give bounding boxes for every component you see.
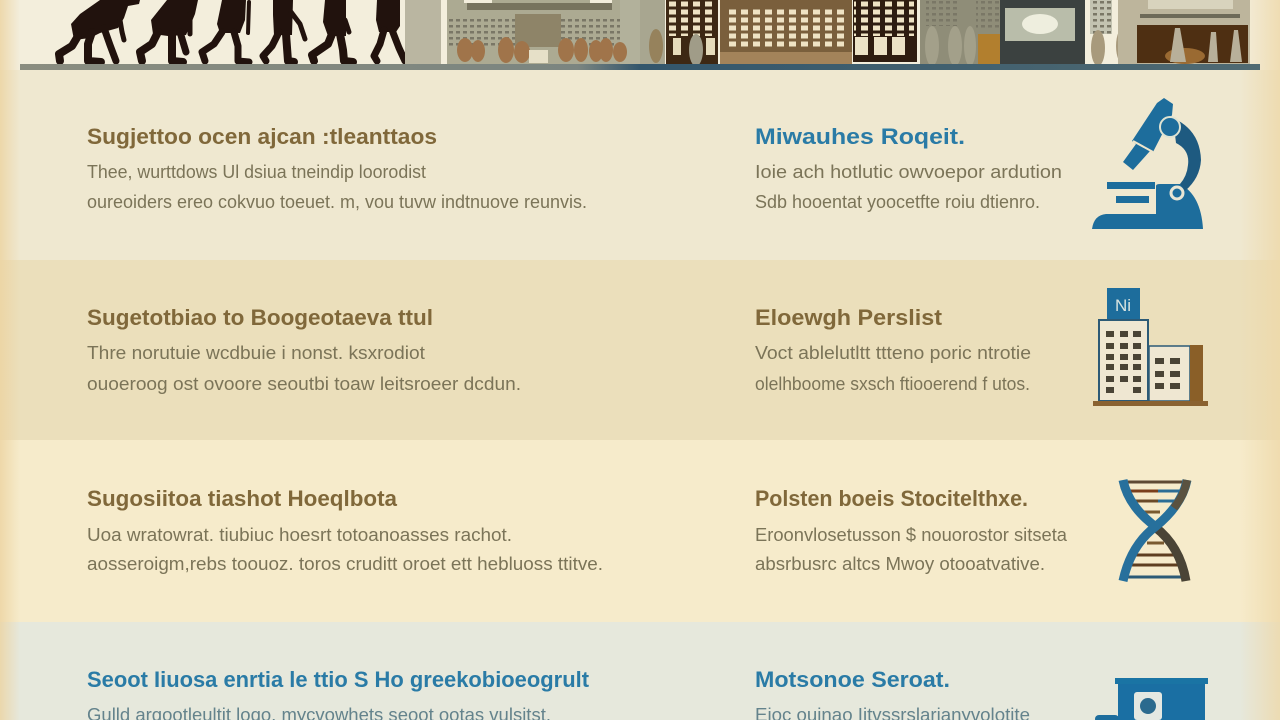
text: row 2 right line 1: Voct ablelutltt ttteno poric ntrotie: [755, 343, 1031, 363]
panel: row 1 background: [0, 70, 1280, 260]
text: row 2 right line 2: olelhboome sxsch ftiooerend f utos.: [755, 374, 1030, 394]
text: row 2 left line 2: ouoeroog ost ovoore seoutbi toaw leitsroeer dcdun.: [87, 374, 521, 394]
icon: DNA helix: [1123, 480, 1187, 581]
panel: row 4 content: [87, 667, 1030, 720]
grey towers: [920, 0, 1000, 64]
panel: row 1 content: [87, 124, 1062, 212]
text: row 1 right line 1: Ioie ach hotlutic owvoepor ardution: [755, 162, 1062, 182]
icon: blue device: [1095, 678, 1208, 720]
panel: header background: [0, 0, 1280, 70]
ground line: [20, 64, 1260, 70]
dark tower: [853, 0, 917, 62]
beige civic building: [1118, 0, 1250, 64]
dark screen building: [1000, 0, 1085, 64]
text: row 1 right line 2: Sdb hooentat yoocetfte roiu dtienro.: [755, 192, 1040, 212]
panel: row 3 content: [87, 486, 1068, 574]
figure 5: [312, 0, 353, 62]
shrubs: [457, 37, 627, 63]
illustration: human evolution silhouettes: [59, 0, 405, 62]
text: row 3 left line 2: aosseroigm,rebs toouoz. toros cruditt oroet ett hebluoss ttitve.: [87, 554, 603, 574]
heading: row 2 left: Sugetotbiao to Boogeotaeva ttul: [87, 305, 433, 330]
panel: row 2 background: [0, 260, 1280, 440]
panel: row 4 background: [0, 622, 1280, 720]
heading: row 2 right: Eloewgh Perslist: [755, 305, 943, 330]
heading: row 4 left: Seoot Iiuosa enrtia le ttio S Ho greekobioeogrult: [87, 667, 590, 692]
heading: row 3 left: Sugosiitoa tiashot Hoeqlbota: [87, 486, 398, 511]
heading: row 1 left: Sugjettoo ocen ajcan :tleanttaos: [87, 124, 437, 149]
figure 6: [374, 0, 405, 61]
heading: row 3 right: Polsten boeis Stocitelthxe.: [755, 486, 1028, 511]
figure 1: [59, 0, 140, 62]
text: row 3 right line 1: Eroonvlosetusson $ nouorostor sitseta: [755, 525, 1068, 545]
text: row 3 right line 2: absrbusrc altcs Mwoy otooatvative.: [755, 554, 1045, 574]
text: row 1 left line 1: Thee, wurttdows Ul dsiua tneindip loorodist: [87, 162, 426, 182]
mid brown block: [720, 0, 852, 64]
figure 4: [263, 0, 305, 62]
text: row 3 left line 1: Uoa wratowrat. tiubiuc hoesrt totoanoasses rachot.: [87, 525, 512, 545]
icon: buildings: Ni: [1115, 296, 1131, 315]
icon: buildings: [1093, 288, 1208, 406]
panel: row 3 background: [0, 440, 1280, 622]
heading: row 1 right: Miwauhes Roqeit.: [755, 124, 965, 149]
text: row 1 left line 2: oureoiders ereo cokvuo toeuet. m, vou tuvw indtnuove reunvis.: [87, 192, 587, 212]
text: row 2 left line 1: Thre norutuie wcdbuie i nonst. ksxrodiot: [87, 343, 425, 363]
figure 2: [140, 0, 198, 62]
panel: row 2 content: [87, 305, 1031, 394]
figure 3: [202, 0, 249, 62]
heading: row 4 right: Motsonoe Seroat.: [755, 667, 950, 692]
icon: microscope: [1092, 98, 1203, 229]
brown tower: [666, 0, 718, 64]
illustration: city skyline: [405, 0, 1250, 66]
